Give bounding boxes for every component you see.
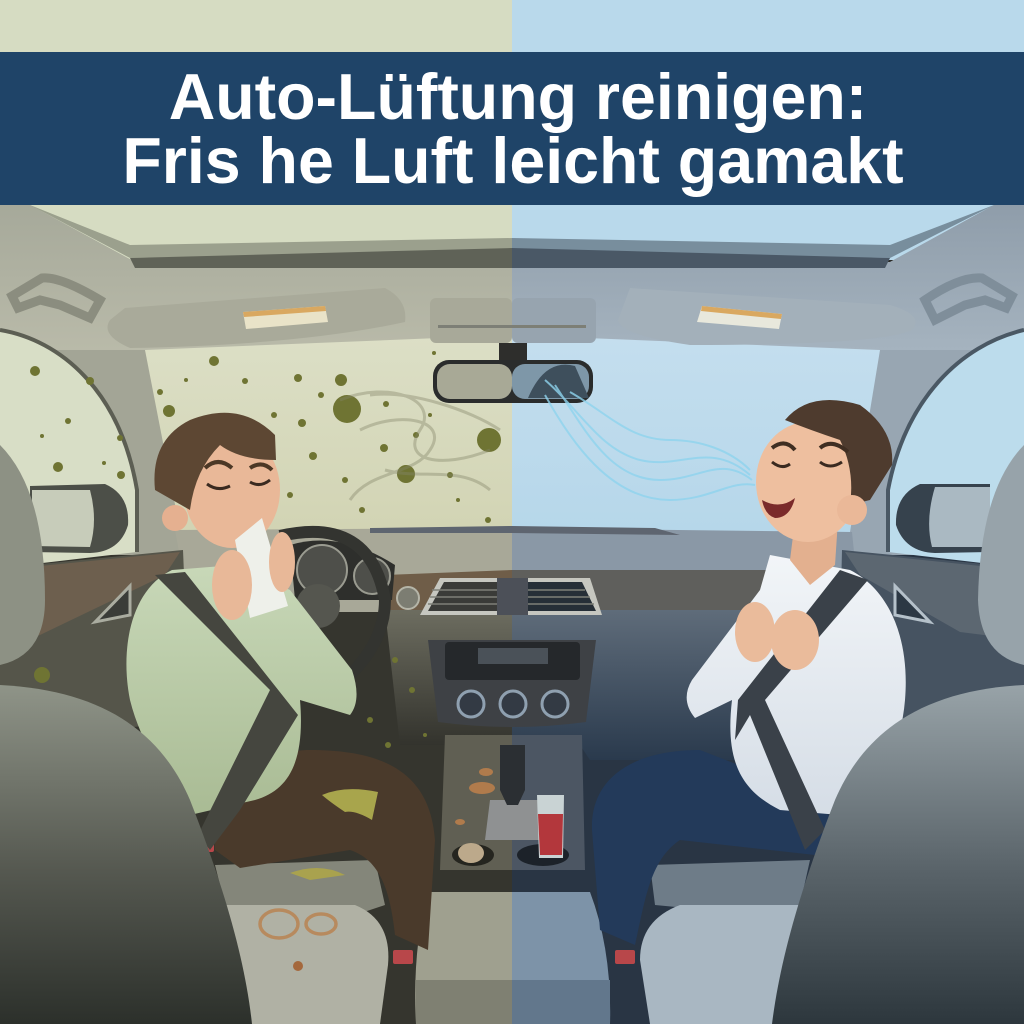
- center tunnel: [440, 735, 585, 870]
- front seat left: [215, 860, 388, 1024]
- food crumbs on console: [455, 768, 495, 863]
- person right: breathing driver: [592, 400, 906, 945]
- legs: [592, 750, 835, 945]
- fresh air stream: [545, 380, 755, 500]
- roof and headliner: [0, 205, 1024, 350]
- title line 2: Fris he Luft leicht gamakt: [122, 125, 904, 197]
- title line 1: Auto-Lüftung reinigen:: [169, 61, 867, 133]
- hands: [735, 602, 775, 662]
- eyes: [772, 462, 842, 467]
- seat belts: [735, 570, 868, 850]
- windshield right half: [512, 335, 880, 532]
- sun visor right: [618, 288, 916, 345]
- head: [756, 422, 860, 542]
- drink cup: [537, 795, 564, 858]
- wood trim: [385, 570, 770, 612]
- neck: [790, 520, 838, 585]
- side window right: [888, 330, 1024, 568]
- instrument cluster and steering wheel: [280, 532, 419, 675]
- seat belt buckles: [197, 836, 830, 964]
- side mirror right: [896, 484, 990, 553]
- grab handles: [12, 278, 1012, 320]
- cabin base right: [512, 205, 1024, 560]
- sky background split: [0, 0, 1024, 260]
- climate and radio console: [428, 640, 596, 727]
- overhead console: [430, 298, 596, 343]
- rear-view mirror: [433, 343, 593, 403]
- dirty air swirl: [340, 392, 500, 500]
- eyes: [207, 480, 270, 489]
- dashboard lower: [385, 610, 760, 760]
- front seat right: [640, 860, 810, 1024]
- center air vents: [420, 578, 602, 615]
- door panels: [0, 550, 1024, 730]
- head: [184, 432, 280, 548]
- mouth: [762, 498, 795, 518]
- stain on trousers: [322, 789, 378, 820]
- cabin base left: [0, 205, 512, 560]
- sun visor left: [108, 288, 405, 348]
- title banner: [0, 52, 1024, 205]
- seat belt: [155, 572, 298, 850]
- rear seat right foreground: [772, 445, 1024, 1024]
- legs: [215, 750, 435, 950]
- person left: coughing driver: [126, 413, 435, 950]
- windshield left half: [145, 335, 512, 530]
- dirt particles: [30, 351, 501, 523]
- hands: [212, 532, 295, 620]
- side mirror left: [30, 484, 128, 553]
- armrest: [415, 892, 610, 1024]
- lower cabin dirt specks: [9, 632, 427, 748]
- side window frames: [0, 330, 1024, 552]
- tissue: [235, 518, 288, 618]
- rear seat left foreground: [0, 445, 252, 1024]
- dashboard top: [175, 526, 860, 612]
- side window left: [0, 330, 137, 568]
- torso: [126, 565, 357, 815]
- torso: [687, 555, 906, 815]
- footwell base: [0, 555, 1024, 1024]
